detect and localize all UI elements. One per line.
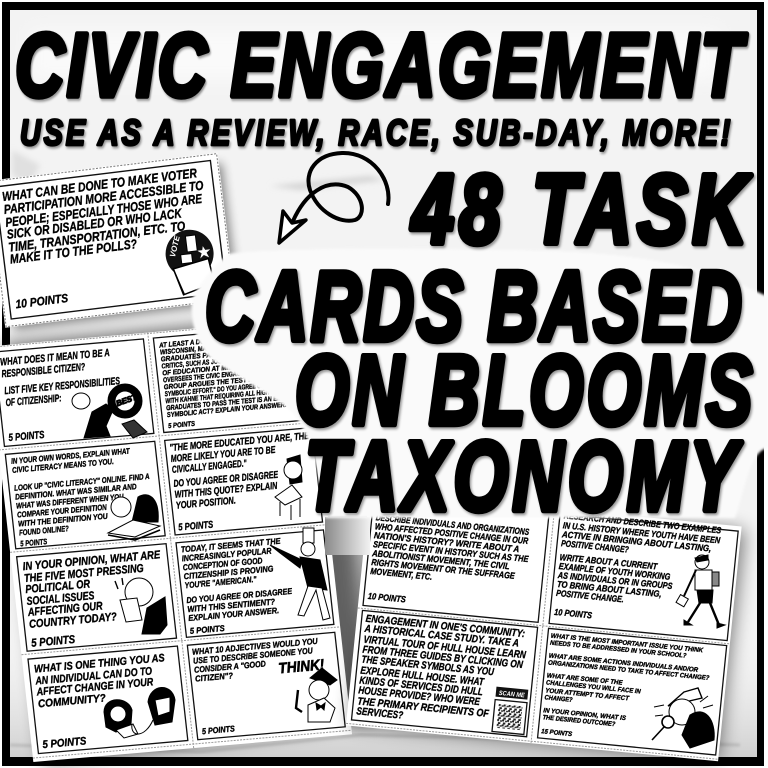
card: ten adjectives: THINK!: [278, 656, 325, 677]
card: one thing an individual can do: [33, 652, 174, 751]
card: pressing issues: AFFECTING OUR: [26, 600, 104, 619]
card: one thing an individual can do: AN INDIVIDUAL CAN DO TO: [34, 665, 153, 688]
card: most important issue in school: CHALLENGES YOU WILL FACE IN: [546, 679, 641, 696]
card: high school civics test: WITH KAHNE THAT REQUIRING ALL HIGH SCHOOL: [165, 387, 293, 405]
card: responsible citizen: [0, 347, 126, 444]
card: responsible citizen: RESPONSIBLE CITIZEN?: [1, 362, 86, 380]
card question text: PARTICIPATION MORE ACCESSIBLE TO: [3, 178, 204, 217]
headline: 48 task cards based on Blooms taxonomy: TAXONOMY: [305, 423, 743, 532]
card: Hull House case study: THE PRIMARY RECIPIENTS OF: [357, 696, 490, 720]
card: more educated quote: YOUR POSITION.: [175, 496, 236, 512]
icon: businessman with BEST ribbon: BEST: [115, 392, 139, 408]
icon: Uncle Sam pointing: [270, 528, 330, 620]
card: most important issue in school: [541, 633, 712, 751]
card: one thing an individual can do: COMMUNITY?: [37, 693, 107, 710]
icon: vote ballot box: [163, 227, 218, 296]
card question text: TIME, TRANSPORTATION, ETC. TO: [8, 218, 186, 255]
card: good citizenship conception: 5 POINTS: [189, 623, 226, 636]
subtitle: USE AS A REVIEW, RACE, SUB-DAY, MORE!: [20, 112, 731, 153]
card: pressing issues: 5 POINTS: [31, 634, 76, 650]
icon: student at desk: [275, 455, 302, 520]
card question text: 10 POINTS: [15, 291, 69, 311]
card: high school civics test: SYMBOLIC EFFORT." DO YOU AGREE OR DISAGREE: [164, 380, 293, 398]
card: good citizenship conception: TODAY, IT SEEMS THAT THE: [180, 536, 281, 554]
icon: boy walking with books: [676, 555, 725, 628]
card: pressing issues: THE FIVE MOST PRESSING: [24, 563, 144, 585]
card: ten adjectives: WHAT 10 ADJECTIVES WOULD YOU: [192, 636, 319, 657]
card: one thing an individual can do: AFFECT CHANGE IN YOUR: [35, 676, 154, 699]
card: youth bringing about change: 10 POINTS: [554, 607, 593, 620]
icon: scan me QR code: [492, 687, 528, 734]
card: positive change groups: SPECIFIC EVENT IN HISTORY SUCH AS THE: [373, 539, 530, 564]
card: more educated quote: [169, 431, 319, 534]
card: high school civics test: OVERSEES THE CIVIC ENGAGEMENT RESEARCH: [163, 366, 292, 384]
card: good citizenship conception: [180, 535, 296, 636]
card: Hull House case study: KINDS OF SERVICES DID HULL: [359, 675, 483, 698]
card: most important issue in school: YOUR ATTEMPT TO AFFECT: [545, 687, 630, 702]
card: most important issue in school: WHAT IS THE MOST IMPORTANT ISSUE YOU THINK: [550, 633, 705, 654]
card: positive change groups: NATION'S HISTORY? WRITE ABOUT A: [374, 530, 520, 554]
icon: woman and man on the telephone: [104, 687, 175, 738]
card: youth bringing about change: EXAMPLE OF YOUTH WORKING: [558, 561, 671, 582]
card question text: [1, 165, 216, 311]
headline: 48 task cards based on Blooms taxonomy: [205, 154, 752, 532]
card: Hull House case study: FROM THREE GUIDES BY CLICKING ON: [362, 645, 524, 671]
card: positive change groups: 10 POINTS: [367, 591, 406, 605]
headline: 48 task cards based on Blooms taxonomy: CARDS BASED: [205, 252, 742, 362]
card: positive change groups: WHO AFFECTED POSITIVE CHANGE IN OUR: [374, 521, 529, 546]
headline: 48 task cards based on Blooms taxonomy: 48 TASK: [410, 154, 752, 264]
card: positive change groups: [367, 512, 532, 616]
card: youth bringing about change: POSITIVE CHANGE.: [556, 588, 624, 604]
card: pressing issues: POLITICAL OR: [25, 578, 91, 596]
card question text: SICK OR DISABLED OR WHO LACK: [6, 205, 184, 242]
panel: single task card on voter participation: [0, 152, 239, 331]
card: civic literacy: 5 POINTS: [20, 537, 48, 548]
card: good citizenship conception: DO YOU AGREE OR DISAGREE: [186, 586, 293, 605]
card: civic literacy: DEFINITION. WHAT WAS SIMILAR AND: [15, 482, 137, 502]
card: responsible citizen: 5 POINTS: [8, 430, 45, 444]
card: more educated quote: CIVICALLY ENGAGED.": [171, 458, 248, 476]
card: youth bringing about change: AS INDIVIDUALS OR IN GROUPS: [557, 570, 673, 591]
card: youth bringing about change: TO BRING ABOUT LASTING,: [557, 579, 662, 599]
icon: surprised man reading a paper: [115, 578, 167, 634]
card: high school civics test: SYMBOLIC ACT? EXPLAIN YOUR ANSWER.: [167, 402, 287, 419]
card: pressing issues: IN YOUR OPINION, WHAT ARE: [22, 549, 161, 573]
card: most important issue in school: ORGANIZATIONS NEED TO TAKE TO AFFECT CHANGE?: [548, 660, 710, 682]
card: good citizenship conception: CITIZENSHIP IS PROVING: [183, 563, 274, 581]
card: ten adjectives: CONSIDER A "GOOD: [194, 658, 266, 675]
card: youth bringing about change: [553, 510, 722, 632]
card: responsible citizen: WHAT DOES IT MEAN TO BE A: [0, 348, 110, 368]
card: responsible citizen: OF CITIZENSHIP:: [5, 393, 62, 409]
icon: scholar reading a book: [108, 495, 160, 540]
card: civic literacy: FOUND ONLINE?: [19, 524, 69, 537]
card: most important issue in school: THE DESIRED OUTCOME?: [542, 714, 616, 728]
card: ten adjectives: CITIZEN"?: [195, 670, 234, 684]
gray shadow patch between cloud and right sheet: [325, 517, 370, 555]
card: most important issue in school: NEEDS TO BE ADDRESSED IN YOUR SCHOOL?: [550, 640, 687, 660]
card: Hull House case study: A HISTORICAL CASE STUDY. TAKE A: [363, 624, 519, 650]
card: Hull House case study: VIRTUAL TOUR OF HULL HOUSE LEARN: [363, 635, 527, 661]
card: civic literacy: IN YOUR OWN WORDS, EXPLAIN WHAT: [11, 446, 131, 466]
card: more educated quote: "THE MORE EDUCATED YOU ARE, THE: [169, 431, 310, 454]
card: most important issue in school: CHANGE?: [544, 694, 573, 704]
card: pressing issues: [21, 549, 170, 650]
panel: sheet of eight task cards, left: [0, 314, 372, 764]
icon: scan me QR code: SCAN ME: [498, 690, 526, 699]
card: civic literacy: WHAT WAS DIFFERENT WHEN YOU: [16, 492, 124, 511]
white cloud behind large headline: [192, 249, 768, 518]
card: youth bringing about change: RESEARCH AND DESCRIBE TWO EXAMPLES: [563, 510, 722, 535]
card question text: PEOPLE; ESPECIALLY THOSE WHO ARE: [4, 191, 203, 230]
card: youth bringing about change: POSITIVE CHANGE?: [561, 538, 630, 555]
panel: sheet of four task cards, right: [346, 491, 745, 761]
card: good citizenship conception: CONCEPTION OF GOOD: [182, 555, 263, 572]
card: high school civics test: 5 POINTS: [168, 421, 196, 430]
card: Hull House case study: [355, 614, 529, 733]
card: ten adjectives: 5 POINTS: [201, 723, 236, 736]
card: Hull House case study: HOUSE PROVIDE? WHO WERE: [358, 685, 481, 708]
card: youth bringing about change: ACTIVE IN BRINGING ABOUT LASTING,: [561, 529, 712, 554]
card question text: WHAT CAN BE DONE TO MAKE VOTER: [1, 165, 198, 204]
card: high school civics test: WISCONSIN, MANDATE THAT HIGH SCHOOL: [160, 338, 288, 357]
card: high school civics test: GROUP ARGUES THE TEST IS "AN EMPTY: [164, 373, 293, 391]
card: high school civics test: GRADUATES TO PASS THE TEST IS AN EMPTY,: [166, 394, 294, 412]
card: ten adjectives: [192, 636, 331, 736]
card: good citizenship conception: INCREASINGLY POPULAR: [181, 546, 273, 563]
card: most important issue in school: 15 POINTS: [541, 728, 573, 738]
arrow: looping hand-drawn arrow: [279, 153, 389, 243]
card: high school civics test: [158, 331, 297, 430]
card: pressing issues: SOCIAL ISSUES: [26, 590, 95, 608]
icon: vote ballot box: VOTE: [168, 234, 182, 258]
card: good citizenship conception: EXPLAIN YOUR ANSWER.: [188, 605, 280, 623]
card: Hull House case study: SERVICES?: [356, 706, 404, 722]
card: more educated quote: MORE LIKELY YOU ARE TO BE: [170, 445, 276, 465]
headline: 48 task cards based on Blooms taxonomy: ON BLOOMS: [295, 336, 752, 446]
card: youth bringing about change: IN U.S. HISTORY WHERE YOUTH HAVE BEEN: [562, 520, 721, 545]
card: civic literacy: COMPARE YOUR DEFINITION: [17, 503, 107, 520]
card: positive change groups: DESCRIBE INDIVIDUALS AND ORGANIZATIONS: [375, 512, 530, 537]
card: high school civics test: CRITICS, SUCH AS JOSEPH KAHNE, PROFESSOR: [161, 352, 289, 370]
card: more educated quote: DO YOU AGREE OR DISAGREE: [173, 470, 279, 490]
card: one thing an individual can do: 5 POINTS: [42, 735, 88, 751]
title: CIVIC ENGAGEMENT: [15, 15, 748, 115]
card: good citizenship conception: WITH THIS SENTIMENT?: [187, 596, 276, 614]
card: high school civics test: OF EDUCATION AT MILLS COLLEGE WHO: [162, 359, 291, 377]
card: most important issue in school: WHAT ARE SOME ACTIONS INDIVIDUALS AND/OR: [548, 653, 699, 674]
card: most important issue in school: WHAT ARE SOME OF THE: [546, 672, 623, 687]
card: high school civics test: GRADUATES PASS A CIVICS TEST. SOME: [160, 345, 289, 363]
card: positive change groups: RIGHTS MOVEMENT OR THE SUFFRAGE: [371, 557, 516, 581]
icon: businessman with BEST ribbon: [72, 384, 147, 438]
card: most important issue in school: IN YOUR OPINION, WHAT IS: [543, 707, 627, 722]
card: youth bringing about change: WRITE ABOUT A CURRENT: [559, 552, 659, 572]
card: more educated quote: WITH THIS QUOTE? EXPLAIN: [174, 481, 279, 501]
card: ten adjectives: USE TO DESCRIBE SOMEONE YOU: [193, 645, 314, 666]
card: positive change groups: MOVEMENT, ETC.: [370, 566, 433, 582]
card question text: MAKE IT TO THE POLLS?: [9, 236, 138, 267]
card: positive change groups: ABOLITIONIST MOVEMENT, THE CIVIL: [371, 548, 510, 571]
card: good citizenship conception: YOU'RE "AMERICAN.": [184, 574, 258, 590]
icon: detective with magnifying glass: [652, 688, 714, 748]
card: one thing an individual can do: WHAT IS ONE THING YOU AS: [34, 652, 166, 676]
card: Hull House case study: ENGAGEMENT IN ONE'S COMMUNITY:: [365, 614, 525, 640]
card: high school civics test: AT LEAST A DOZEN STATES, INCLUDING: [158, 332, 280, 350]
card: civic literacy: LOOK UP "CIVIC LITERACY" ONLINE. FIND A: [14, 472, 150, 493]
card: Hull House case study: THE SPEAKER SYMBOLS AS YOU: [361, 655, 495, 678]
icon: colonial man with tricorn hat: [296, 668, 337, 722]
card: pressing issues: COUNTRY TODAY?: [29, 611, 118, 631]
card: responsible citizen: LIST FIVE KEY RESPONSIBILITIES: [4, 376, 121, 397]
card: civic literacy: WITH THE DEFINITION YOU: [18, 512, 108, 528]
card: more educated quote: 5 POINTS: [178, 520, 214, 534]
card: civic literacy: [11, 445, 156, 548]
card: Hull House case study: EXPLORE HULL HOUSE. WHAT: [360, 666, 486, 689]
card: civic literacy: CIVIC LITERACY MEANS TO YOU.: [12, 457, 114, 475]
